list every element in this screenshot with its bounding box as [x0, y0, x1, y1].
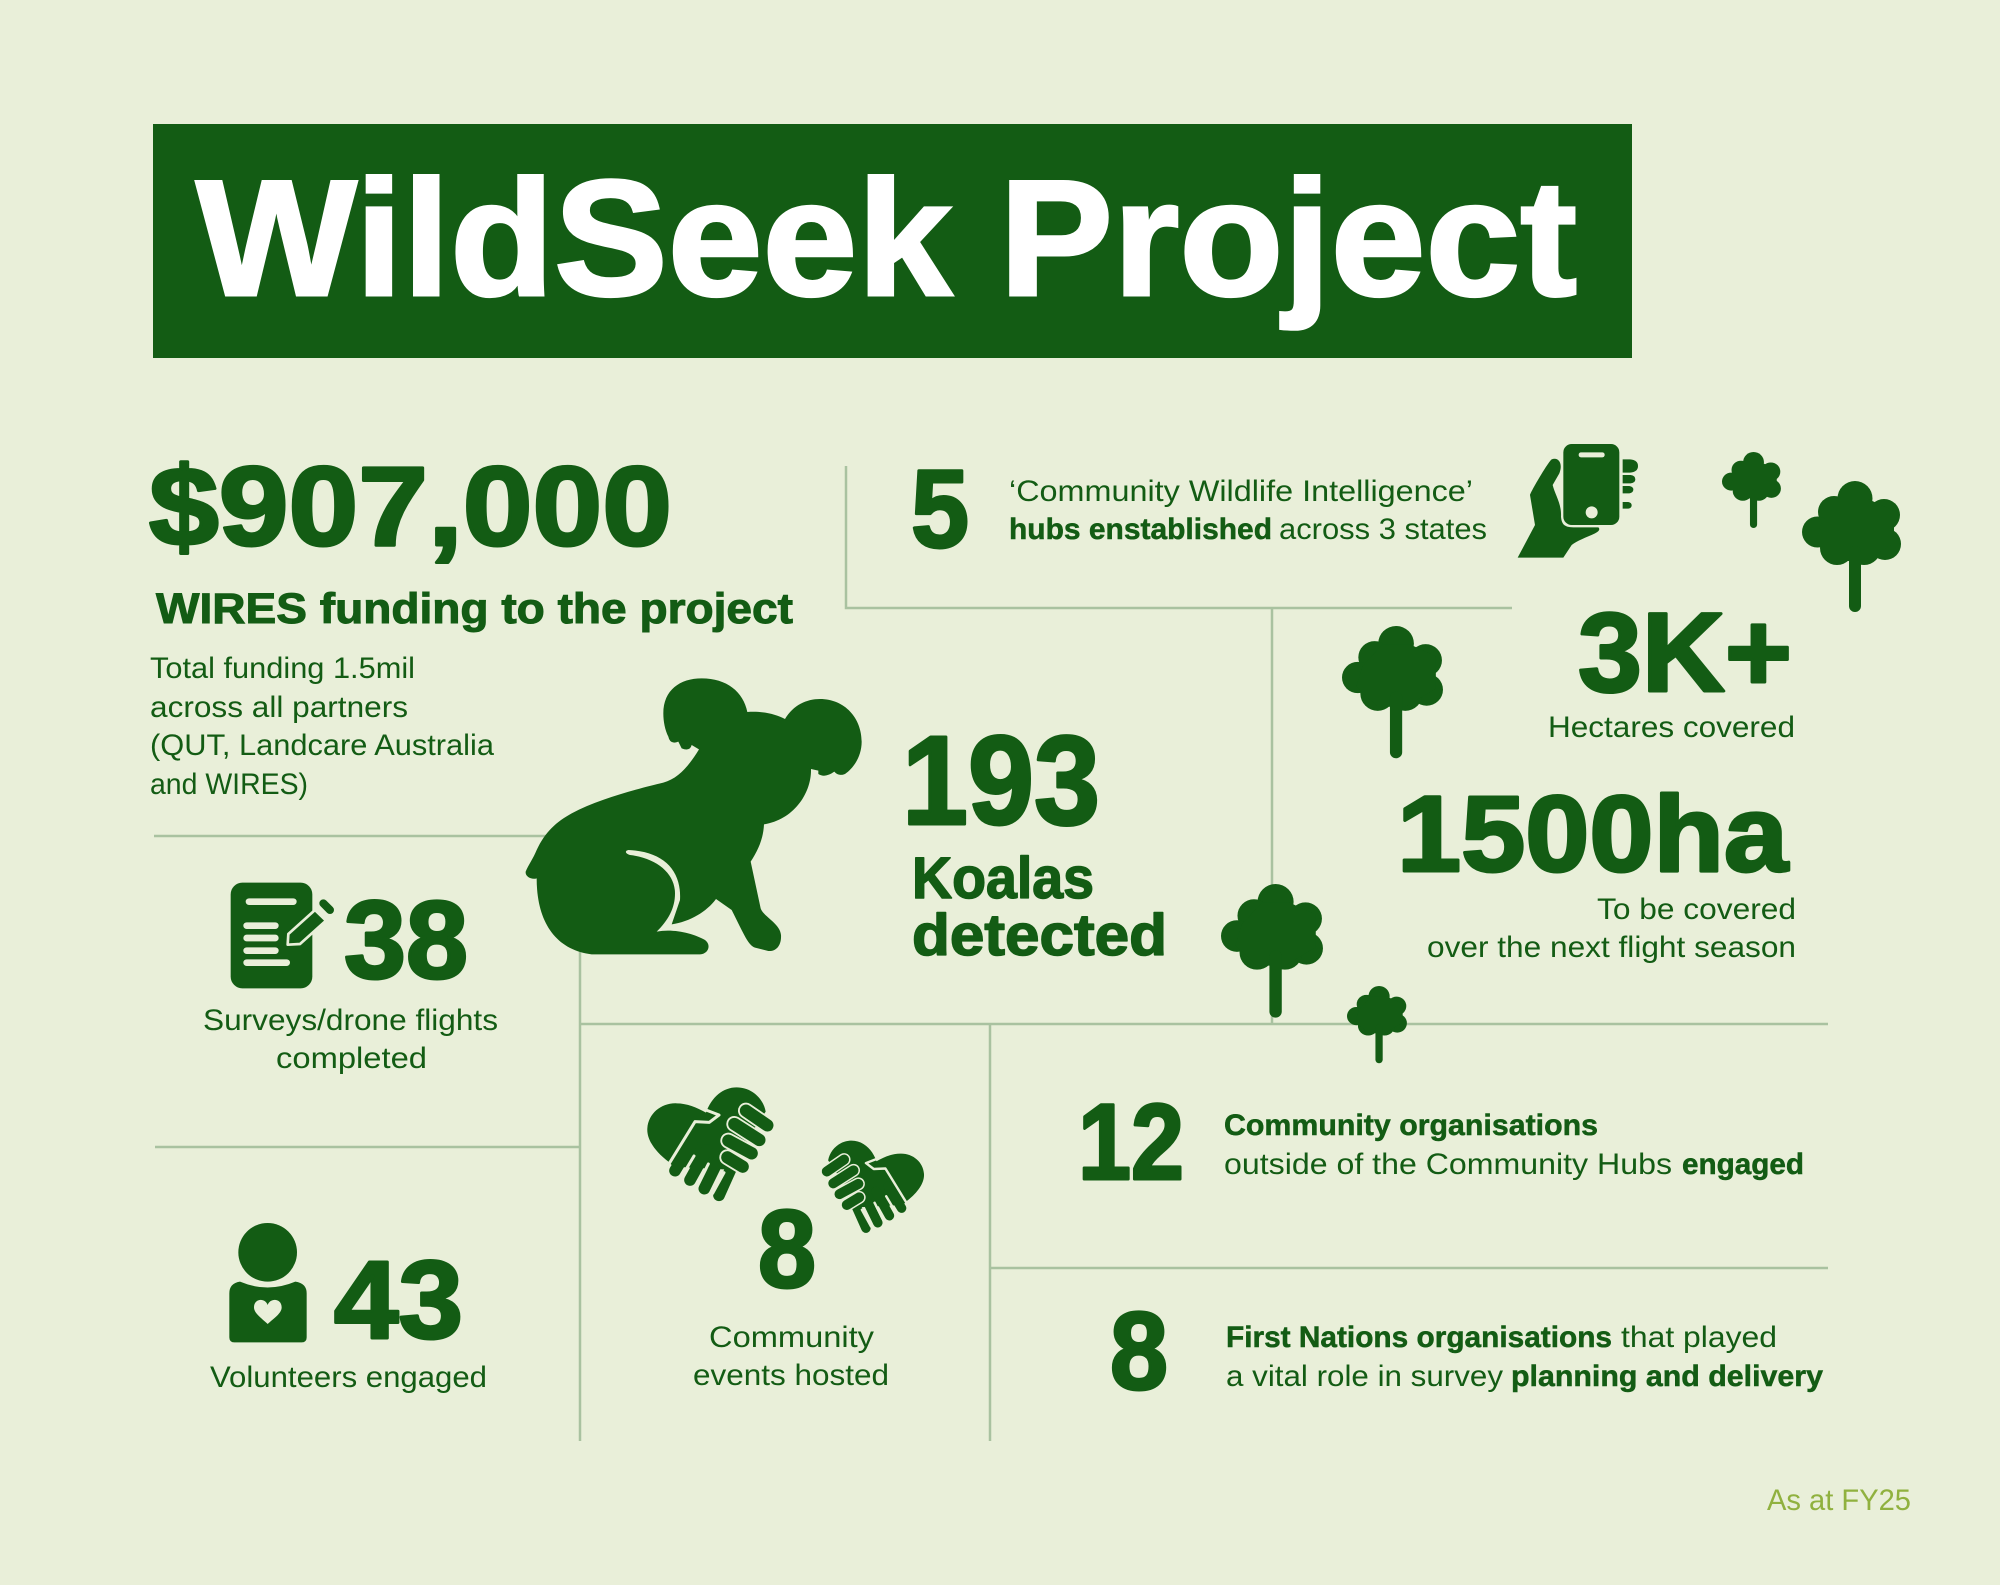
text: First Nations organisations	[1226, 1321, 1824, 1393]
stat: funding amount: $907,000	[149, 444, 672, 569]
label: to be covered	[1427, 893, 1796, 964]
stat: 8 First Nations: 8	[1110, 1290, 1168, 1413]
label: koalas detected: detected	[912, 903, 1167, 968]
text: First Nations organisations: that played	[1621, 1321, 1777, 1354]
icon: tree lower	[1221, 884, 1323, 1018]
text: total funding note	[150, 652, 495, 801]
stat: 5 hubs: 5	[911, 448, 969, 571]
icon: small tree top	[1722, 452, 1781, 528]
text: hubs description: ‘Community Wildlife Intelligence’	[1009, 475, 1473, 508]
text: First Nations organisations: planning and delivery	[1511, 1360, 1824, 1393]
icon: volunteer person with heart	[229, 1223, 307, 1342]
label: community events: events hosted	[693, 1359, 889, 1392]
icon: survey document and pencil	[231, 883, 330, 988]
stat: 38 surveys: 38	[344, 879, 468, 1002]
text: hubs description: hubs enstablished	[1009, 513, 1272, 546]
text: community organisations: outside of the Community Hubs	[1224, 1148, 1672, 1181]
label: to be covered: over the next flight season	[1427, 931, 1796, 964]
stat: 8 events: 8	[758, 1188, 816, 1311]
stat: 12 organisations: 12	[1078, 1081, 1184, 1202]
text: total funding note: Total funding 1.5mil	[150, 652, 415, 685]
label: community events	[693, 1321, 889, 1392]
stat: 3K+ hectares: 3K+	[1578, 590, 1792, 715]
icon: tree middle	[1342, 626, 1443, 758]
divider lines	[154, 466, 1828, 1441]
label: to be covered: To be covered	[1597, 893, 1796, 926]
heading: WIRES funding: WIRES funding to the project	[156, 585, 793, 633]
stat: 193 koalas: 193	[902, 710, 1100, 851]
label: surveys completed: completed	[276, 1042, 427, 1075]
text: total funding note: and WIRES)	[150, 768, 308, 801]
icon: large tree right	[1802, 481, 1901, 612]
icon: heart handshake right	[827, 1141, 924, 1228]
icon: koala silhouette	[526, 678, 862, 954]
label: surveys completed	[203, 1004, 498, 1075]
icon: small tree lower	[1347, 986, 1407, 1063]
footnote: As at FY25	[1767, 1484, 1911, 1517]
stat: 43 volunteers: 43	[334, 1239, 463, 1362]
label: community events: Community	[709, 1321, 874, 1354]
icon: heart handshake left	[647, 1087, 767, 1195]
label: hectares covered: Hectares covered	[1548, 711, 1795, 744]
text: community organisations: engaged	[1682, 1148, 1804, 1181]
text: hubs description	[1009, 475, 1487, 546]
text: First Nations organisations: First Nations organisations	[1226, 1321, 1612, 1354]
text: total funding note: across all partners	[150, 691, 408, 724]
title banner: WildSeek Project	[196, 146, 1577, 330]
label: koalas detected	[912, 846, 1167, 968]
text: First Nations organisations: a vital role in survey	[1226, 1360, 1503, 1393]
label: surveys completed: Surveys/drone flights	[203, 1004, 498, 1037]
stat: 1500ha: 1500ha	[1397, 773, 1789, 894]
text: community organisations	[1224, 1109, 1804, 1181]
text: total funding note: (QUT, Landcare Australia	[150, 729, 495, 762]
text: community organisations: Community organisations	[1224, 1109, 1598, 1142]
label: volunteers engaged: Volunteers engaged	[210, 1361, 487, 1394]
text: hubs description: across 3 states	[1279, 513, 1487, 546]
icon: hand holding phone	[1518, 444, 1638, 558]
label: koalas detected: Koalas	[912, 846, 1094, 911]
